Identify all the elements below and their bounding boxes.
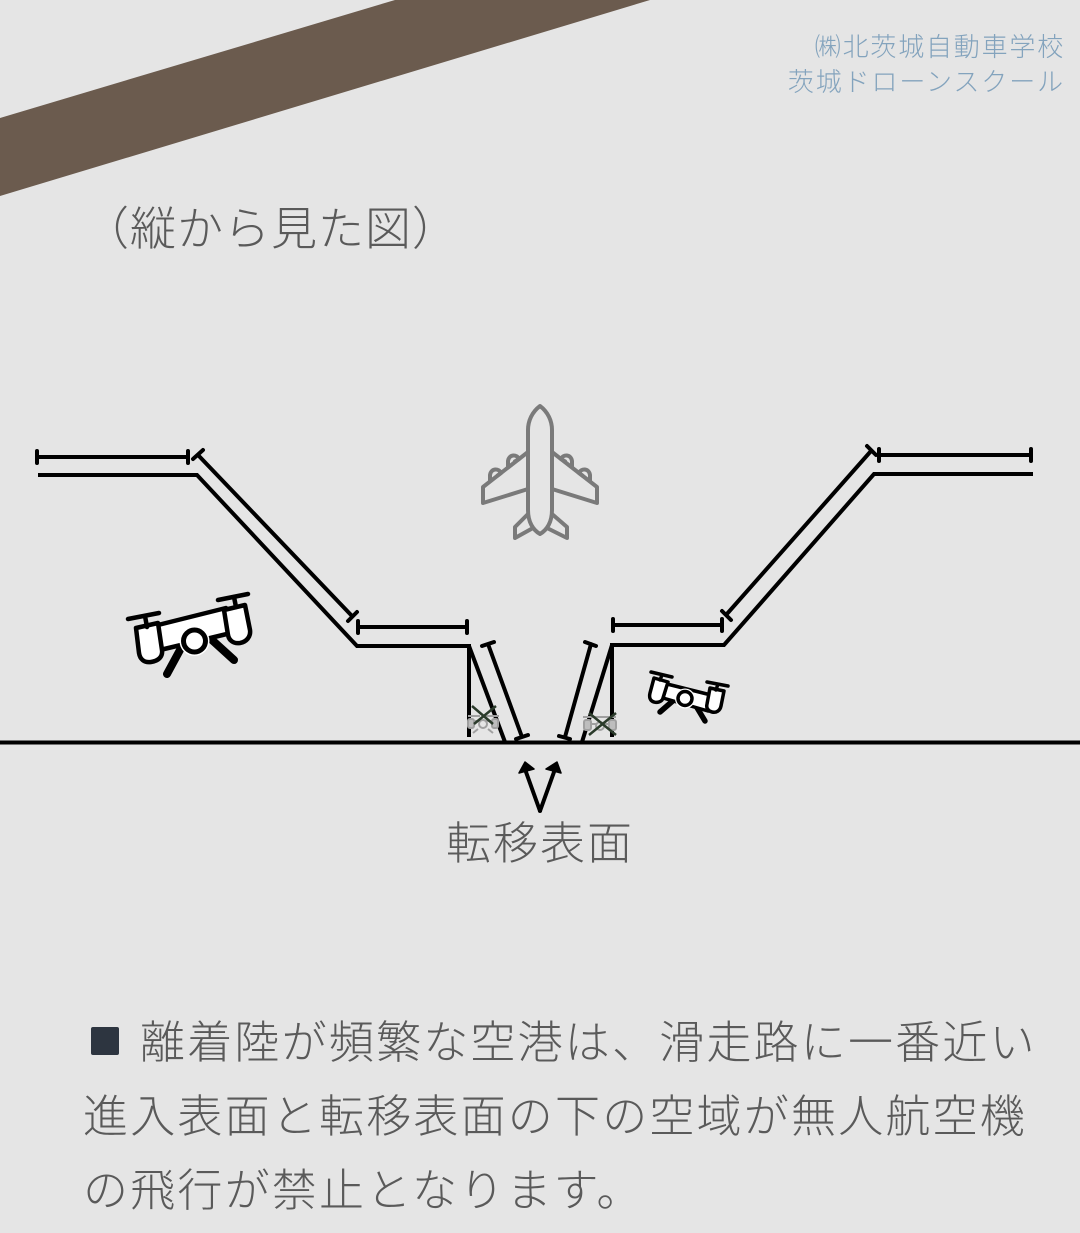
icon: prohibited drone, right [583,713,616,735]
heading: view label: （縦から見た図） [83,203,459,255]
surface outline: left transition slope [469,646,505,742]
dimension markers: right [559,446,1031,739]
body text [83,1017,1037,1216]
school name [788,32,1065,97]
school name: ㈱北茨城自動車学校 [815,32,1065,62]
body text: 進入表面と転移表面の下の空域が無人航空機 [83,1091,1027,1142]
diagonal brown band [0,0,650,196]
icon: small drone, allowed [650,672,728,721]
icon: airplane [483,406,597,538]
surface outline: left side [38,475,469,737]
surface outline: right transition slope [582,645,612,742]
surface outline: right side [612,474,1033,737]
label: transition surface: 転移表面 [446,818,634,869]
icon: prohibited drone, left [468,706,499,733]
dimension markers: left [37,450,528,739]
icon: large drone, allowed [128,594,250,674]
arrow: to transition surfaces [519,762,561,811]
bullet square [91,1027,119,1055]
school name: 茨城ドローンスクール [788,67,1065,97]
ground line [0,740,1080,744]
body text: の飛行が禁止となります。 [83,1165,644,1216]
body text: 離着陸が頻繁な空港は、滑走路に一番近い [140,1017,1037,1068]
